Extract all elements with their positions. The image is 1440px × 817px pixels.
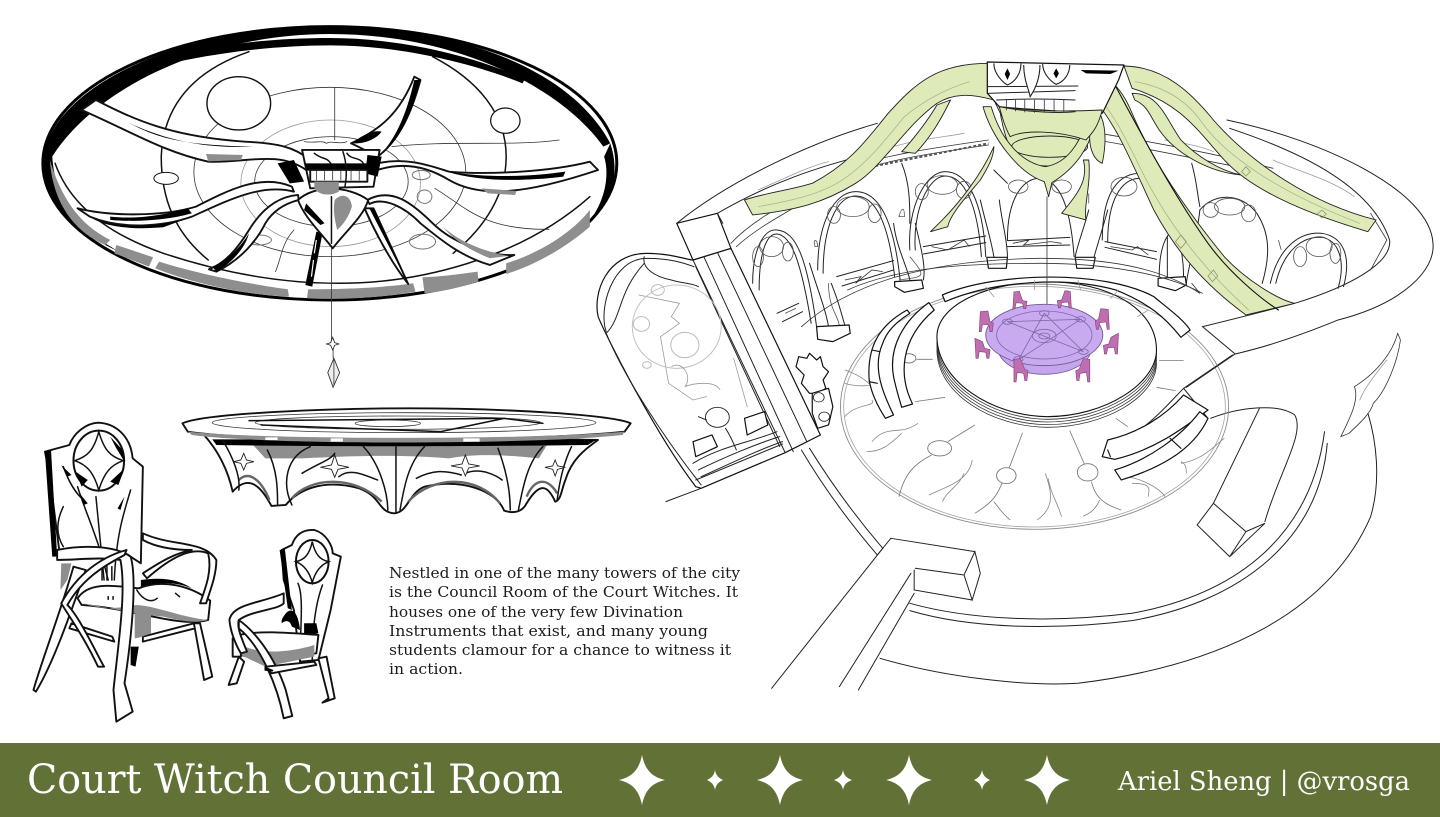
stained glass window door — [597, 248, 820, 488]
back bench — [942, 277, 1190, 337]
chandelier body — [278, 142, 382, 248]
canopy bowl — [983, 107, 1102, 197]
small chair sketch — [229, 530, 341, 718]
small chair back — [280, 530, 341, 662]
arch tracery — [753, 176, 1341, 327]
footer banner — [0, 743, 1440, 817]
table top — [182, 408, 631, 442]
magic circle — [997, 311, 1092, 362]
artist credit: Ariel Sheng | @vrosga — [1117, 767, 1410, 797]
small chair arms and legs — [229, 593, 335, 718]
table base — [998, 350, 1091, 374]
divination pendant line — [1042, 197, 1049, 322]
wall arches — [753, 163, 1347, 327]
left curved benches — [869, 303, 934, 418]
star ornaments — [619, 755, 1070, 805]
chair legs and rails — [33, 533, 216, 722]
pendant — [327, 248, 340, 387]
chandelier arms — [78, 77, 598, 272]
room drawing lower half — [597, 248, 1400, 690]
canopy left arm — [744, 63, 1002, 232]
table chairs — [975, 291, 1119, 382]
column plinths — [810, 200, 1186, 342]
dais stepped platform — [937, 282, 1156, 427]
canopy right arms — [1062, 66, 1376, 315]
tower outer walls — [666, 413, 1377, 690]
lower straps — [305, 208, 408, 287]
chair back — [45, 423, 143, 580]
description text: in action. — [389, 660, 463, 678]
ceiling medallions — [154, 77, 520, 249]
large chair sketch — [33, 423, 216, 722]
ceiling outer ring — [43, 27, 617, 300]
grey underside band — [50, 160, 590, 299]
room drawing upper half — [677, 62, 1433, 387]
council table with pentagram — [975, 291, 1119, 382]
gallery balustrade — [777, 236, 1203, 327]
table top — [986, 304, 1103, 366]
description text: Instruments that exist, and many young — [389, 622, 708, 640]
tower rim — [677, 120, 1433, 387]
small chair seat — [233, 632, 318, 667]
right curved benches — [1102, 395, 1208, 480]
chair seat cushion — [78, 579, 210, 622]
title: Court Witch Council Room — [27, 757, 563, 803]
gallery cornice — [731, 133, 1387, 270]
entry pillar — [1102, 355, 1297, 557]
floor medallion ring — [840, 284, 1229, 529]
description text: houses one of the very few Divination — [389, 603, 683, 621]
plant and pedestal — [796, 353, 833, 428]
table base and arches — [204, 435, 598, 513]
table sketch — [182, 408, 631, 513]
description text: Nestled in one of the many towers of the city — [389, 564, 741, 582]
floor spokes and circles — [845, 354, 1224, 520]
description text: students clamour for a chance to witness it — [389, 641, 731, 659]
green canopy back ribbons — [902, 93, 1241, 175]
ceiling chandelier sketch — [43, 27, 617, 387]
wall ornament — [1341, 333, 1400, 437]
description text — [389, 564, 741, 678]
canopy crown — [987, 62, 1124, 140]
ceiling concentric rings — [161, 52, 559, 272]
description text: is the Council Room of the Court Witches. It — [389, 583, 738, 601]
